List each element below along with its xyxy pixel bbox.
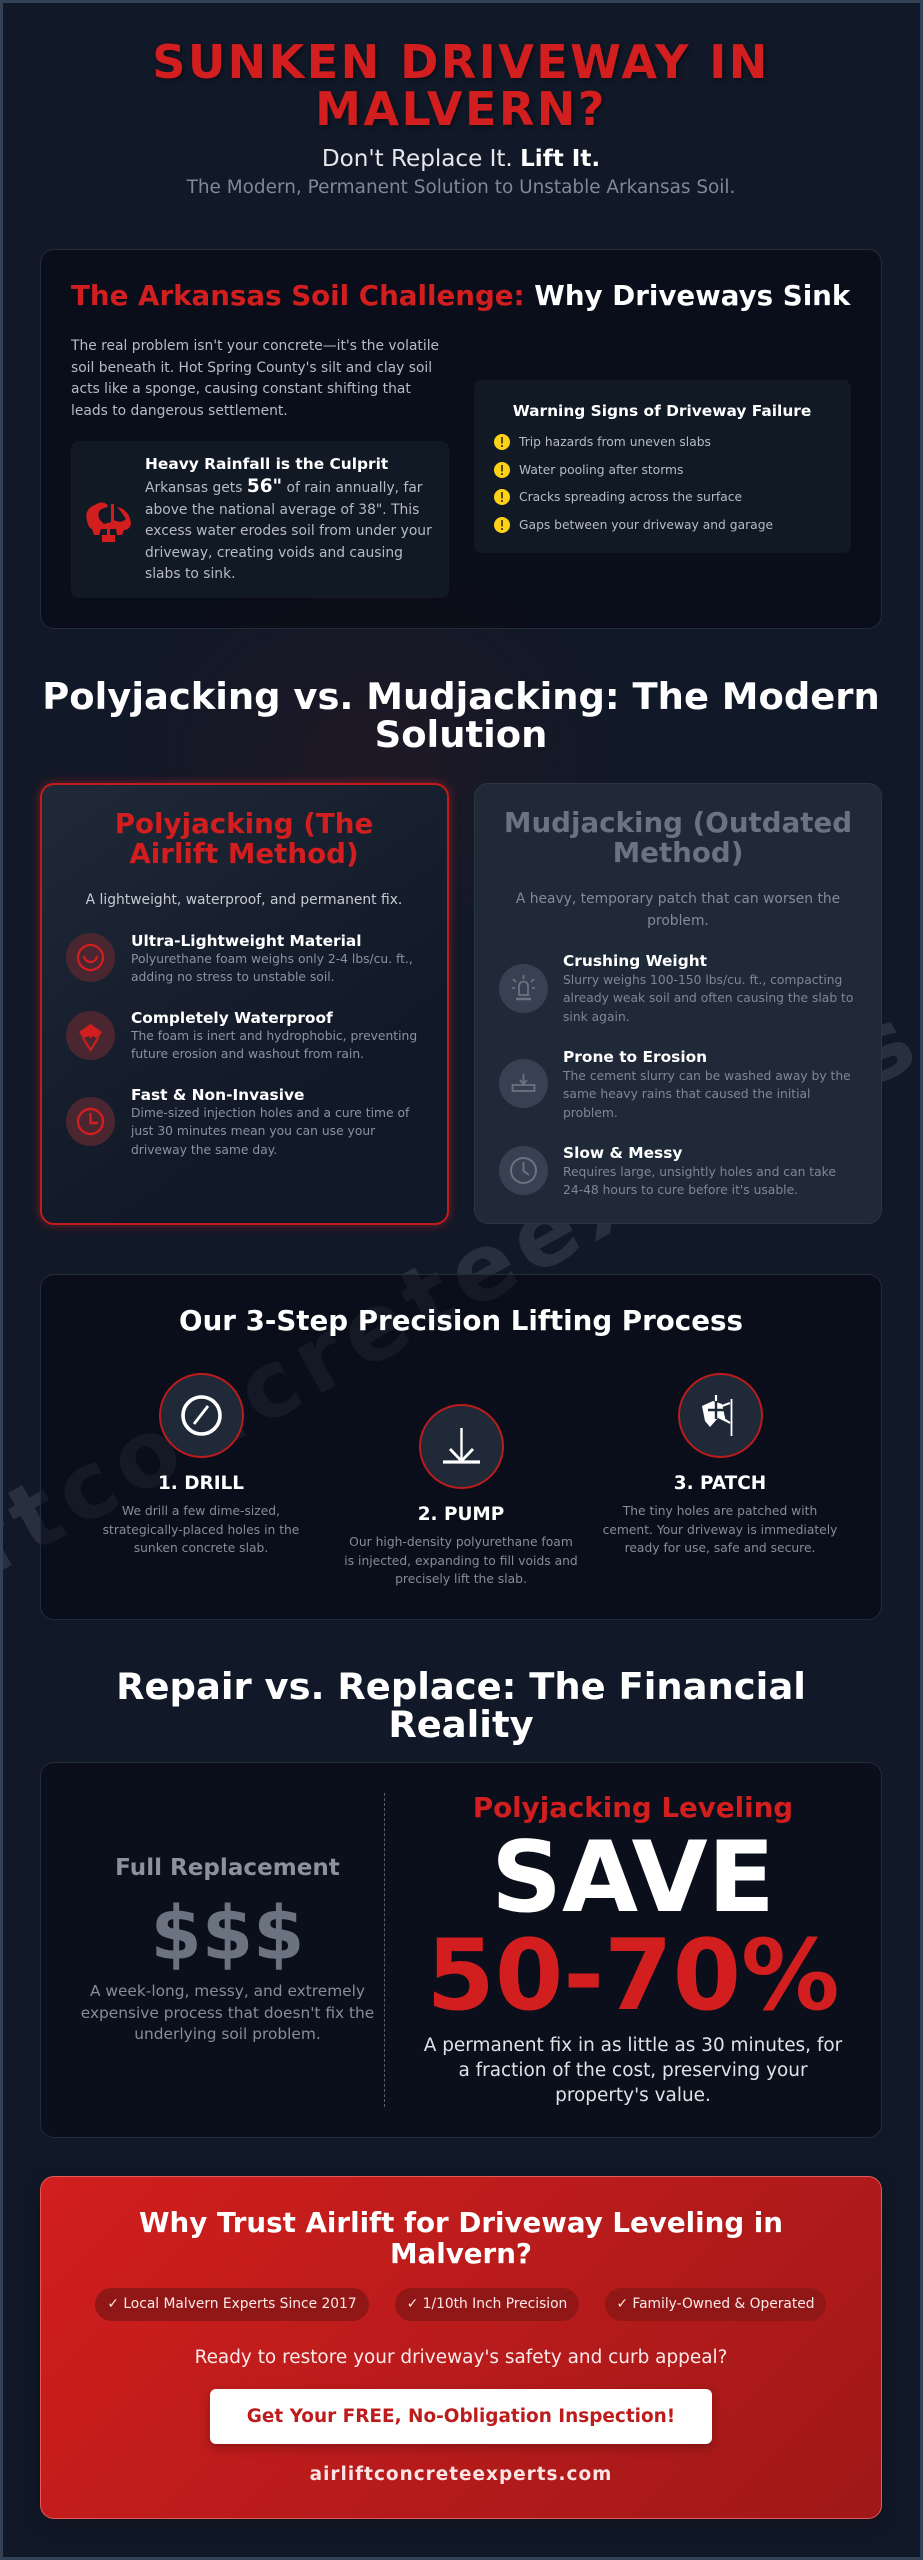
step text: [344, 1535, 578, 1586]
mudjacking subtitle: [516, 891, 840, 929]
panel: soil challenge: [40, 249, 882, 629]
feature heading: Prone to Erosion: [563, 1048, 707, 1066]
icon: smile circle: [66, 933, 115, 982]
mudjacking title: Mudjacking (Outdated: [504, 806, 852, 839]
callout text: Arkansas gets 56" of rain annually, far: [145, 476, 422, 497]
step text: precisely lift the slab.: [395, 1572, 527, 1586]
replacement text: expensive process that doesn't fix the: [81, 2004, 374, 2022]
replacement text: underlying soil problem.: [134, 2025, 321, 2043]
text: soil intro: leads to dangerous settlement.: [71, 403, 288, 419]
polyjacking title: Airlift Method): [129, 837, 359, 870]
text: soil intro: soil beneath it. Hot Spring County's silt and clay soil: [71, 360, 432, 376]
step 1: [103, 1373, 299, 1555]
badge: [395, 2288, 579, 2321]
warning item: Cracks spreading across the surface: [519, 490, 742, 504]
polyjacking subtitle: A lightweight, waterproof, and permanent fix.: [86, 892, 402, 908]
step text: The tiny holes are patched with: [623, 1504, 817, 1518]
warning heading: Warning Signs of Driveway Failure: [513, 402, 811, 420]
cta heading: Why Trust Airlift for Driveway Leveling in: [139, 2206, 783, 2239]
icon: pump: [418, 1404, 504, 1489]
badge: ✓ Family-Owned & Operated: [616, 2296, 814, 2312]
panel: process: [40, 1274, 882, 1620]
heading: repair vs replace: Reality: [388, 1703, 534, 1746]
warning item: Gaps between your driveway and garage: [519, 518, 773, 532]
feature heading: Crushing Weight: [563, 952, 707, 970]
heading: repair vs replace: Repair vs. Replace: The Financial: [116, 1665, 806, 1708]
mudjacking title: Method): [613, 836, 743, 869]
badge: ✓ 1/10th Inch Precision: [407, 2296, 567, 2312]
feature heading: Completely Waterproof: [131, 1008, 333, 1026]
feature text: Dime-sized injection holes and a cure time of: [131, 1106, 409, 1120]
callout text: excess water erodes soil from under your: [145, 523, 432, 539]
panel: financial comparison: [40, 1762, 882, 2138]
feature heading: Ultra-Lightweight Material: [131, 932, 362, 950]
callout text: [145, 476, 432, 582]
step 2: [344, 1404, 578, 1586]
savings text: A permanent fix in as little as 30 minutes, for: [424, 2034, 842, 2056]
warning item: Water pooling after storms: [519, 463, 683, 477]
feature text: driveway the same day.: [131, 1143, 277, 1157]
replacement text: [81, 1982, 374, 2043]
feature text: The foam is inert and hydrophobic, preventing: [131, 1028, 417, 1042]
feature text: future erosion and washout from rain.: [131, 1047, 364, 1061]
panel: polyjacking: [40, 783, 449, 1225]
feature text: Slurry weighs 100-150 lbs/cu. ft., compacting: [563, 972, 842, 986]
text: soil intro: acts like a sponge, causing constant shifting that: [71, 381, 411, 397]
savings heading: Polyjacking Leveling: [473, 1791, 793, 1824]
divider: [384, 1793, 385, 2107]
feature text: Polyurethane foam weighs only 2-4 lbs/cu. ft.,: [131, 952, 413, 966]
text: soil intro: The real problem isn't your concrete—it's the volatile: [71, 338, 439, 354]
callout text: above the national average of 38". This: [145, 502, 419, 518]
replacement text: A week-long, messy, and extremely: [90, 1982, 365, 2000]
step text: ready for use, safe and secure.: [625, 1541, 815, 1555]
badge: ✓ Local Malvern Experts Since 2017: [107, 2296, 357, 2312]
feature text: [130, 1028, 417, 1061]
feature: erosion: [499, 1048, 851, 1120]
step text: cement. Your driveway is immediately: [603, 1523, 837, 1537]
process heading: Our 3-Step Precision Lifting Process: [179, 1304, 743, 1337]
cta prompt: Ready to restore your driveway's safety and curb appeal?: [195, 2347, 727, 2368]
step text: sunken concrete slab.: [134, 1541, 268, 1555]
savings text: property's value.: [555, 2084, 711, 2106]
step label: 1. DRILL: [158, 1473, 244, 1494]
feature text: sink again.: [563, 1010, 630, 1024]
step 3: [603, 1373, 837, 1555]
tagline: The Modern, Permanent Solution to Unstable Arkansas Soil.: [187, 177, 735, 198]
panel: warning signs: [474, 380, 851, 553]
icon: rainfall: [86, 502, 131, 542]
savings text: a fraction of the cost, preserving your: [458, 2060, 808, 2080]
icon: droplet shield: [66, 1011, 115, 1060]
panel: call to action: [40, 2176, 882, 2519]
heading: polyjacking vs mudjacking: Polyjacking vs. Mudjacking: The Modern: [42, 675, 880, 718]
feature text: [563, 1068, 851, 1120]
step text: Our high-density polyurethane foam: [349, 1535, 573, 1549]
feature heading: Slow & Messy: [563, 1144, 682, 1162]
mudjacking subtitle: problem.: [647, 913, 709, 929]
feature: slow and messy: [499, 1144, 836, 1197]
panel: rainfall callout: [71, 441, 449, 598]
feature: ultra-lightweight: [66, 932, 413, 984]
cta heading: [139, 2206, 783, 2270]
feature text: just 30 minutes mean you can use your: [131, 1124, 375, 1138]
polyjacking title: [115, 807, 373, 870]
cta button: Get Your FREE, No-Obligation Inspection!: [247, 2406, 675, 2427]
heading: repair vs replace: [116, 1665, 806, 1746]
title: [152, 35, 770, 136]
feature text: already weak soil and often causing the slab to: [563, 991, 853, 1005]
replacement heading: Full Replacement: [115, 1855, 340, 1881]
feature: waterproof: [66, 1008, 417, 1061]
feature text: [130, 1106, 410, 1157]
callout text: driveway, creating voids and causing: [145, 545, 403, 561]
website: airliftconcreteexperts.com: [310, 2464, 612, 2485]
column: polyjacking savings: [424, 1791, 842, 2106]
feature heading: Fast & Non-Invasive: [131, 1086, 304, 1104]
heading: polyjacking vs mudjacking: [42, 675, 880, 756]
badge: [95, 2288, 369, 2321]
badge: [605, 2288, 826, 2321]
icon: clock: [499, 1146, 548, 1195]
panel: mudjacking: [474, 783, 882, 1224]
icon: drill: [158, 1373, 244, 1458]
icon: patch: [678, 1373, 763, 1458]
feature text: same heavy rains that caused the initial: [563, 1087, 810, 1101]
feature text: [563, 1164, 836, 1197]
step text: [103, 1504, 299, 1555]
step text: [603, 1504, 837, 1555]
warning item: Trip hazards from uneven slabs: [519, 435, 711, 449]
feature text: The cement slurry can be washed away by the: [563, 1068, 851, 1082]
feature text: adding no stress to unstable soil.: [131, 970, 335, 984]
price symbol: $$$: [150, 1891, 305, 1977]
cta button: [210, 2389, 712, 2444]
feature text: 24-48 hours to cure before it's usable.: [563, 1183, 798, 1197]
save word: SAVE: [491, 1821, 775, 1935]
title: MALVERN?: [315, 82, 607, 136]
step text: strategically-placed holes in the: [103, 1523, 299, 1537]
header: [152, 35, 770, 198]
callout heading: Heavy Rainfall is the Culprit: [145, 455, 388, 473]
feature: fast non-invasive: [66, 1086, 410, 1157]
heading: soil challenge: The Arkansas Soil Challenge: Why Driveways Sink: [71, 279, 850, 312]
callout text: slabs to sink.: [145, 566, 236, 582]
step label: 2. PUMP: [418, 1504, 504, 1525]
icon: settling slab: [499, 1059, 548, 1108]
polyjacking title: Polyjacking (The: [115, 807, 373, 840]
feature text: [563, 972, 853, 1024]
subtitle: Don't Replace It. Lift It.: [322, 146, 600, 172]
feature text: Requires large, unsightly holes and can take: [563, 1164, 836, 1178]
text: soil intro: [70, 338, 439, 419]
feature text: problem.: [563, 1106, 618, 1120]
cta heading: Malvern?: [390, 2237, 532, 2270]
step text: is injected, expanding to fill voids and: [344, 1554, 578, 1568]
step label: 3. PATCH: [674, 1473, 766, 1494]
background glow: [120, 560, 620, 960]
feature text: [131, 952, 413, 984]
column: full replacement: [81, 1855, 374, 2043]
title: SUNKEN DRIVEWAY IN: [152, 35, 770, 89]
mudjacking title: [504, 806, 852, 869]
savings text: [424, 2034, 842, 2106]
icon: siren: [499, 964, 548, 1013]
heading: polyjacking vs mudjacking: Solution: [375, 712, 547, 756]
savings percentage: 50-70%: [426, 1919, 840, 2033]
feature: crushing weight: [499, 952, 853, 1024]
mudjacking subtitle: A heavy, temporary patch that can worsen the: [516, 891, 840, 907]
step text: We drill a few dime-sized,: [122, 1504, 280, 1518]
icon: clock: [66, 1097, 115, 1146]
